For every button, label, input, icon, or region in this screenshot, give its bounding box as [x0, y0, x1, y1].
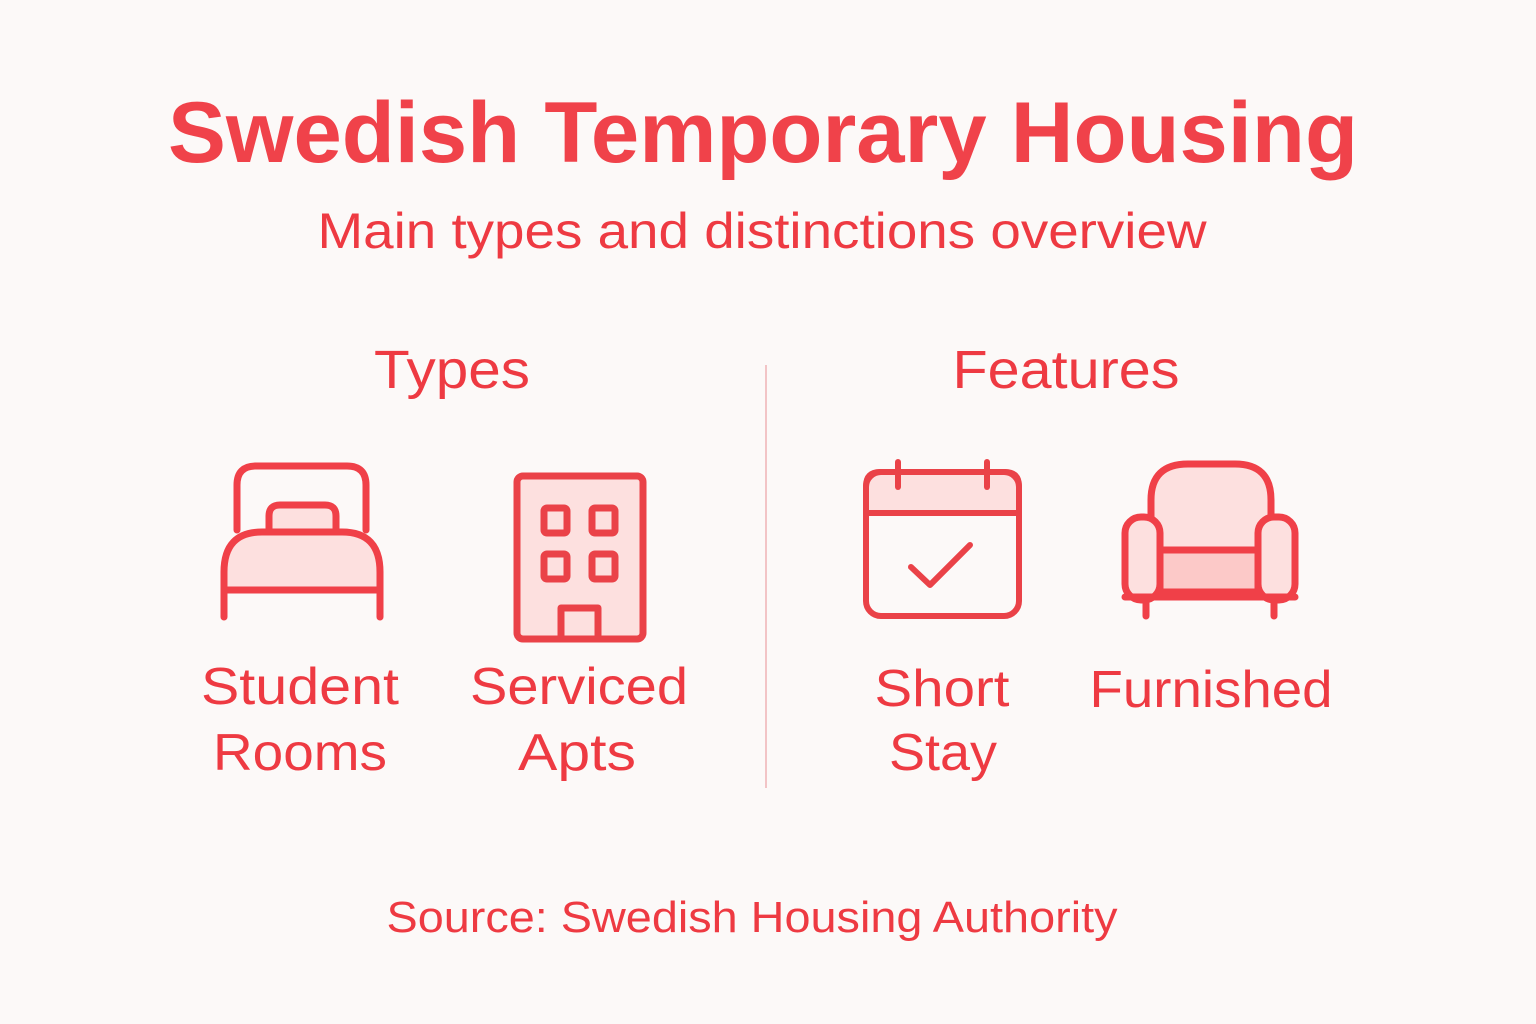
icon: bed	[224, 466, 380, 617]
label: Serviced Apts: Apts	[518, 724, 636, 782]
label: Serviced Apts: Serviced	[470, 658, 688, 716]
label: Short Stay	[874, 660, 1010, 782]
heading: Types: Types	[374, 340, 530, 400]
icon: armchair	[1125, 464, 1295, 616]
label: Serviced Apts	[470, 658, 688, 782]
icon: building	[517, 476, 643, 639]
title: Swedish Temporary Housing	[168, 85, 1358, 181]
label: Student Rooms	[201, 658, 400, 782]
label: Student Rooms: Student	[201, 658, 400, 716]
label: Short Stay: Stay	[889, 724, 997, 782]
source: Source: Swedish Housing Authority	[386, 893, 1118, 942]
label: Furnished: Furnished	[1090, 661, 1332, 719]
label: Student Rooms: Rooms	[213, 724, 387, 782]
heading: Features: Features	[952, 340, 1180, 400]
icon: calendar	[866, 462, 1019, 616]
subtitle: Main types and distinctions overview	[318, 203, 1207, 259]
label: Short Stay: Short	[874, 660, 1010, 718]
